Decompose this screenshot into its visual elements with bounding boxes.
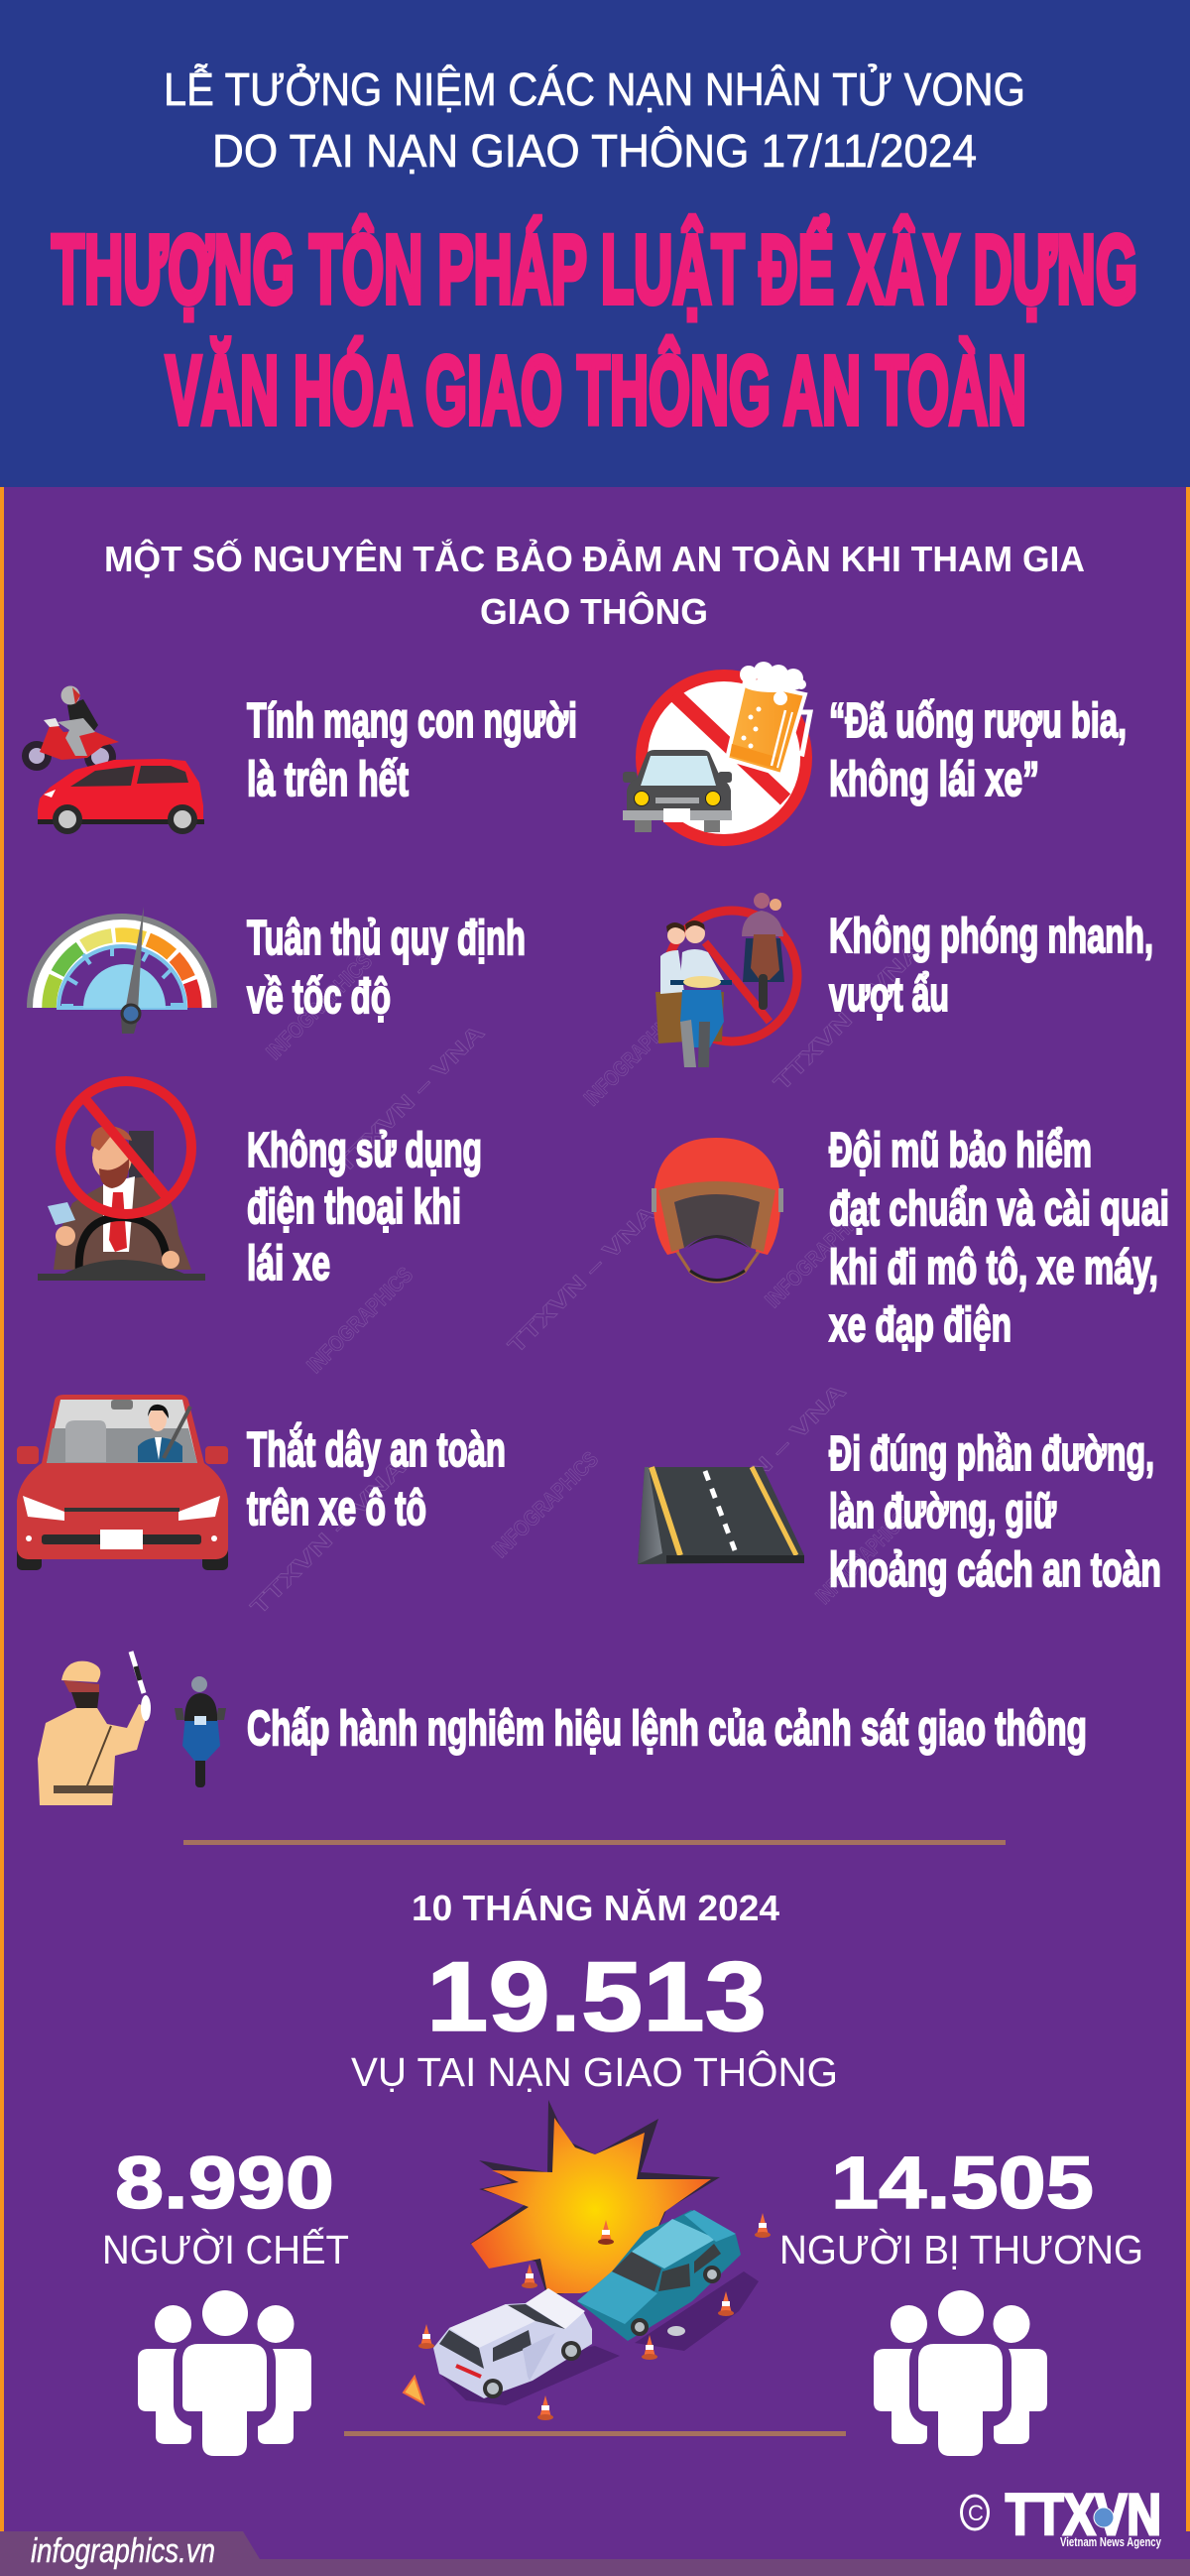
watermarks: INFOGRAPHICS: [487, 1446, 603, 1562]
icon: motorcycle and red car: [22, 686, 204, 834]
icon: car crash with explosion: [404, 2100, 771, 2420]
watermarks: INFOGRAPHICS: [261, 948, 377, 1064]
watermarks: [246, 937, 926, 1620]
stat: accidents: VỤ TAI NẠN GIAO THÔNG: [351, 2049, 838, 2095]
stat: deaths: NGƯỜI CHẾT: [102, 2227, 349, 2272]
icon: helmet: [652, 1138, 783, 1282]
text: obey speed limit: Tuân thủ quy định: [247, 912, 526, 965]
section heading: principles: [104, 538, 1085, 632]
icon: no beer with car: [623, 662, 810, 840]
text: lane discipline: làn đường, giữ: [829, 1485, 1056, 1538]
text: no phone use: Không sử dụng: [247, 1124, 482, 1177]
title: [52, 215, 1137, 444]
blue car: [577, 2210, 741, 2341]
icon: red car with seat belt: [17, 1395, 228, 1570]
section heading: principles: GIAO THÔNG: [480, 590, 708, 632]
white car: [433, 2288, 592, 2398]
logo: TTXVN: TTXVN: [1006, 2483, 1161, 2547]
text: no phone use: điện thoại khi: [247, 1180, 461, 1234]
footer: site tab: [0, 2531, 1190, 2576]
text: seat belt: trên xe ô tô: [247, 1482, 426, 1535]
stat: deaths: [102, 2142, 349, 2272]
shadows: [441, 2271, 759, 2405]
subtitle: memorial day: DO TAI NẠN GIAO THÔNG 17/11/2024: [212, 125, 977, 177]
icon: no phone while driving: [38, 1081, 205, 1281]
text: life first: Tính mạng con người: [247, 694, 577, 748]
panel: blue header: [0, 0, 1190, 487]
stat: injured: 14.505: [831, 2142, 1094, 2224]
stat: injured: [779, 2142, 1143, 2272]
icon: speedometer: [27, 907, 217, 1034]
text: seat belt: Thắt dây an toàn: [247, 1422, 506, 1477]
text: no reckless driving: vượt ẩu: [829, 968, 949, 1022]
watermarks: INFOGRAPHICS: [760, 1196, 876, 1312]
text: life first: [247, 694, 577, 806]
text: no drink driving: [829, 694, 1127, 806]
divider: bottom: [344, 2431, 846, 2436]
subtitle: memorial day: LỄ TƯỞNG NIỆM CÁC NẠN NHÂN TỬ VONG: [164, 63, 1025, 115]
text: no drink driving: không lái xe”: [829, 753, 1039, 806]
section heading: principles: MỘT SỐ NGUYÊN TẮC BẢO ĐẢM AN TOÀN KHI THAM GIA: [104, 538, 1085, 579]
text: life first: là trên hết: [247, 753, 409, 806]
watermarks: TTXVN – VNA: [769, 937, 926, 1095]
divider: top stats: [183, 1840, 1006, 1845]
text: no phone use: lái xe: [247, 1237, 330, 1290]
stat: injured: NGƯỜI BỊ THƯƠNG: [779, 2227, 1143, 2272]
text: obey speed limit: [247, 912, 526, 1024]
text: no phone use: [247, 1124, 482, 1290]
stat: accidents: 19.513: [426, 1941, 767, 2051]
text: seat belt: [247, 1422, 506, 1535]
traffic cones: [404, 2213, 771, 2420]
watermarks: TTXVN – VNA: [503, 1200, 660, 1358]
icon: road: [638, 1467, 804, 1564]
text: no reckless driving: [829, 910, 1153, 1022]
watermarks: TTXVN – VNA: [686, 1379, 851, 1543]
watermarks: TTXVN – VNA: [246, 1455, 411, 1620]
text: helmet rule: xe đạp điện: [829, 1298, 1012, 1352]
text: obey speed limit: về tốc độ: [247, 970, 391, 1024]
logo: TTXVN: C: [968, 2501, 984, 2525]
icon: traffic police and rider: [38, 1652, 226, 1805]
text: lane discipline: [829, 1427, 1161, 1597]
watermarks: INFOGRAPHICS: [579, 1002, 687, 1110]
subtitle: memorial day: [164, 63, 1025, 177]
icon: no speeding riders: [655, 893, 797, 1067]
logo: TTXVN: [962, 2483, 1162, 2549]
watermarks: INFOGRAPHICS: [301, 1262, 417, 1378]
text: helmet rule: [829, 1124, 1169, 1352]
stat: accidents: [351, 1941, 838, 2095]
icon: people left: [138, 2290, 311, 2456]
footer: site tab: infographics.vn: [31, 2532, 215, 2570]
watermarks: TTXVN – VNA: [331, 1020, 489, 1177]
watermarks: INFOGRAPHICS: [810, 1507, 912, 1609]
icon: people right: [874, 2290, 1047, 2456]
stat: deaths: 8.990: [115, 2142, 334, 2224]
text: period: 10 THÁNG NĂM 2024: [412, 1888, 779, 1928]
explosion burst: [470, 2100, 720, 2296]
